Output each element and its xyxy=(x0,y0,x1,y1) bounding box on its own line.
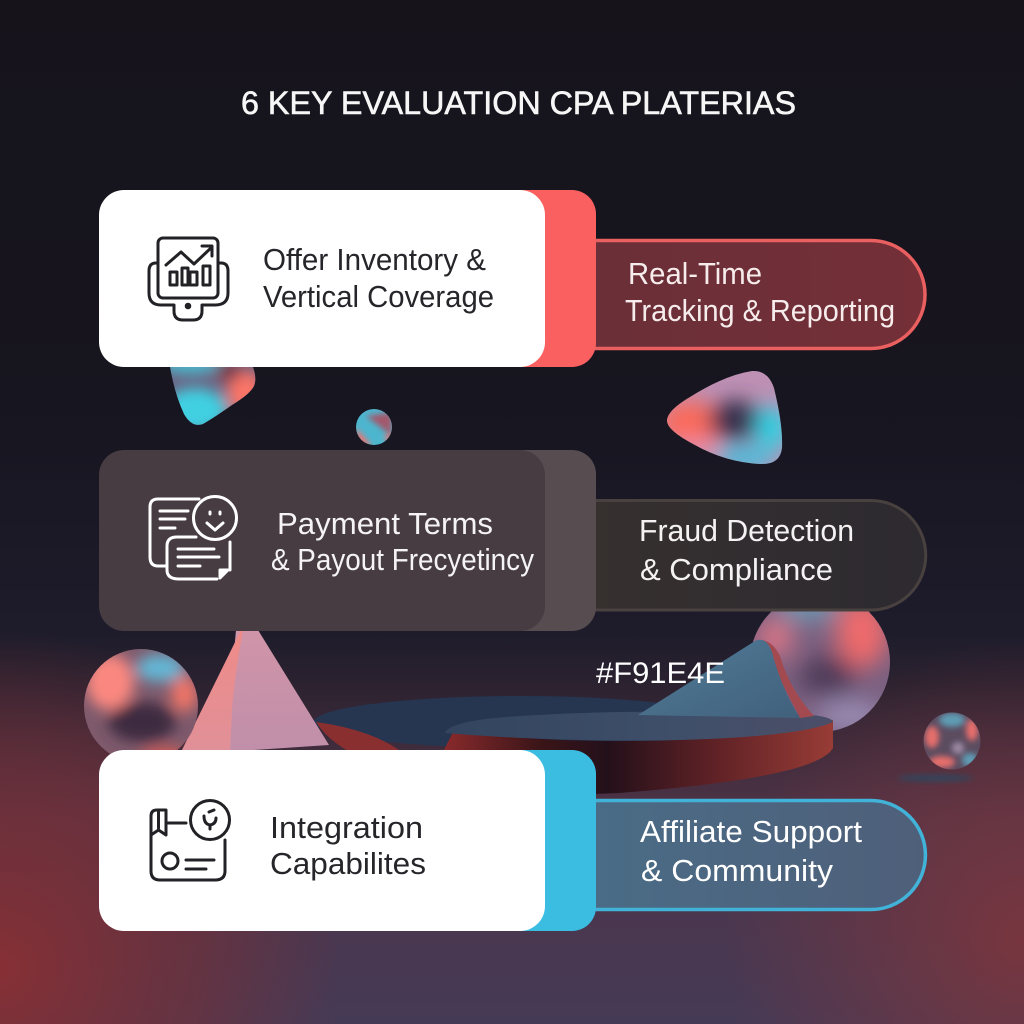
3D scene: glass sphere behind cone xyxy=(752,612,890,731)
floating shape: right blob xyxy=(666,371,782,464)
icon: documents with smiley xyxy=(150,496,236,579)
label: integration: Capabilites xyxy=(270,847,426,881)
pill: real-time tracking xyxy=(585,240,925,348)
label: offer inventory: Offer Inventory & xyxy=(263,243,486,277)
3D scene: left glass sphere xyxy=(84,649,198,754)
accent tab: grey xyxy=(480,450,596,631)
label: integration: Integration xyxy=(270,811,423,845)
accent tab: red xyxy=(480,190,596,367)
pill: fraud detection: & Compliance xyxy=(640,553,833,587)
card: payment terms xyxy=(99,450,545,631)
accent tab: blue xyxy=(480,750,596,931)
3D scene: platform xyxy=(314,696,833,796)
pill: fraud detection xyxy=(585,500,926,610)
label: integration xyxy=(270,811,426,881)
floating shape: small sphere xyxy=(356,409,392,445)
pill: affiliate support xyxy=(585,800,925,910)
3D scene: pink pyramid xyxy=(181,630,329,752)
panel: payment terms row xyxy=(99,450,926,631)
pill: real-time tracking: Real-Time xyxy=(628,257,762,291)
label: offer inventory: Vertical Coverage xyxy=(263,280,494,314)
pill: real-time tracking: Tracking & Reporting xyxy=(625,294,895,328)
label: offer inventory xyxy=(263,243,494,314)
3D scene: blue cone xyxy=(638,640,814,718)
card: integration xyxy=(99,750,545,931)
floating shape: left blob xyxy=(170,367,256,425)
pill: affiliate support: & Community xyxy=(641,854,834,888)
panel: integration row xyxy=(99,750,925,931)
hex colour label: #F91E4E xyxy=(596,657,725,690)
pill: fraud detection: Fraud Detection xyxy=(639,514,854,548)
card: offer inventory xyxy=(99,190,545,367)
pill: affiliate support: Affiliate Support xyxy=(640,815,863,849)
icon: tablet chart xyxy=(149,238,228,320)
label: payment terms xyxy=(271,507,535,577)
panel: offer inventory row xyxy=(99,190,925,367)
label: payment terms: Payment Terms xyxy=(277,507,493,541)
icon: certificate with coin xyxy=(151,800,230,880)
label: payment terms: & Payout Frecyetincy xyxy=(271,543,535,577)
3D scene: right small sphere xyxy=(897,712,981,782)
title: 6 KEY EVALUATION CPA PLATERIAS xyxy=(241,85,796,121)
